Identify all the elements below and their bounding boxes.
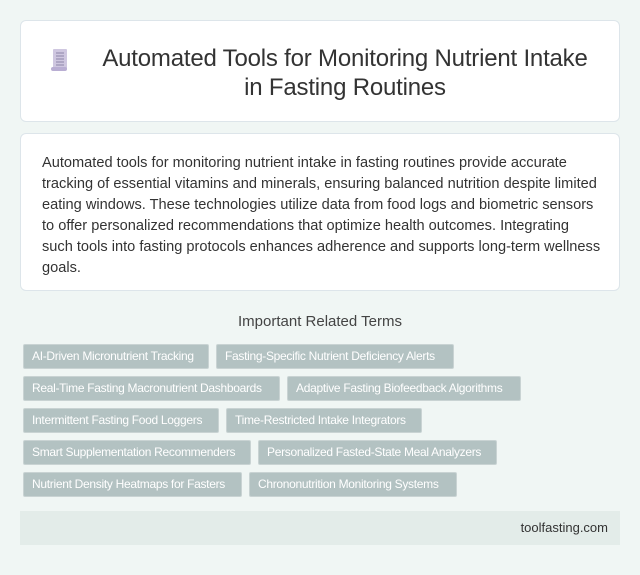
tag [249, 472, 457, 497]
tag [23, 376, 280, 401]
title: in Fasting Routines [244, 74, 446, 101]
tag: Personalized Fasted-State Meal Analyzers [267, 445, 481, 459]
tag [23, 440, 251, 465]
footer text: toolfasting.com [521, 520, 608, 535]
tag [23, 472, 242, 497]
tag: Real-Time Fasting Macronutrient Dashboards [32, 381, 262, 395]
description text: Automated tools for monitoring nutrient intake in fasting routines provide accurate [42, 155, 567, 171]
tag: Smart Supplementation Recommenders [32, 445, 235, 459]
tag: Intermittent Fasting Food Loggers [32, 413, 202, 427]
tag [23, 344, 209, 369]
description text: to offer personalized recommendations that optimize health outcomes. Integrating [42, 218, 569, 234]
header card [20, 20, 620, 122]
tag [226, 408, 422, 433]
footer [20, 511, 620, 545]
description text [42, 155, 600, 276]
tag: Adaptive Fasting Biofeedback Algorithms [296, 381, 502, 395]
tag: Chrononutrition Monitoring Systems [258, 477, 439, 491]
tag: AI-Driven Micronutrient Tracking [32, 349, 194, 363]
icon: document [51, 49, 67, 71]
tag [216, 344, 454, 369]
title: Automated Tools for Monitoring Nutrient Intake [102, 45, 588, 72]
tag [287, 376, 521, 401]
tag: Fasting-Specific Nutrient Deficiency Alerts [225, 349, 435, 363]
description text: such tools into fasting protocols enhances adherence and supports long-term wellness [42, 239, 600, 255]
tag: Nutrient Density Heatmaps for Fasters [32, 477, 225, 491]
tag [23, 408, 219, 433]
tag [258, 440, 497, 465]
related terms heading: Important Related Terms [238, 313, 402, 330]
description text: goals. [42, 260, 81, 276]
description text: tracking of essential vitamins and minerals, ensuring balanced nutrition despite limited [42, 176, 597, 192]
description text: eating windows. These technologies utilize data from food logs and biometric sensors [42, 197, 593, 213]
tag: Time-Restricted Intake Integrators [235, 413, 406, 427]
description card [20, 133, 620, 291]
title [102, 45, 588, 101]
